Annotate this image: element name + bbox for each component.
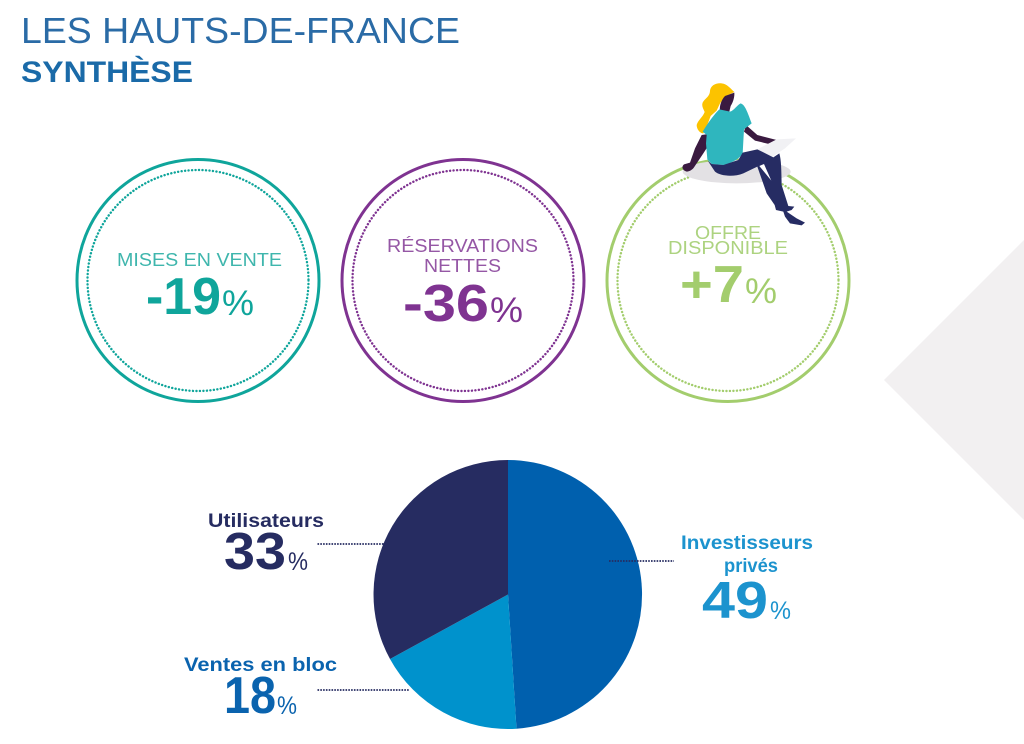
panel: réservations nettes: RÉSERVATIONS: [387, 236, 538, 256]
panel: réservations nettes: NETTES: [424, 256, 501, 276]
label: ventes en bloc: [184, 655, 409, 725]
slice: utilisateurs: [374, 460, 508, 659]
label: utilisateurs: [208, 511, 385, 581]
panel: mises en vente: MISES EN VENTE: [117, 250, 282, 270]
label: investisseurs privés: 49: [702, 572, 768, 630]
panel: offre disponible: OFFRE: [695, 223, 761, 243]
panel: mises en vente: -19: [146, 268, 221, 326]
panel: réservations nettes: %: [490, 291, 523, 330]
label: investisseurs privés: Investisseurs: [681, 533, 813, 554]
slice: investisseurs privés: [508, 460, 642, 729]
panel: offre disponible: %: [745, 272, 777, 311]
subtitle: SYNTHÈSE: [21, 55, 193, 89]
panel: réservations nettes: -36: [403, 275, 489, 333]
panel: offre disponible: +7: [680, 256, 744, 314]
panel: offre disponible: [607, 160, 849, 402]
label: utilisateurs: Utilisateurs: [208, 511, 324, 532]
label: utilisateurs: 33: [224, 523, 286, 581]
label: utilisateurs: %: [288, 548, 308, 576]
label: investisseurs privés: [609, 533, 813, 630]
label: ventes en bloc: %: [277, 692, 297, 720]
background diamond: [884, 240, 1024, 520]
panel: offre disponible: DISPONIBLE: [668, 238, 788, 258]
panel: réservations nettes: [342, 160, 584, 402]
label: ventes en bloc: 18: [224, 667, 276, 725]
slice: ventes en bloc: [390, 594, 516, 729]
pie chart: [374, 460, 642, 729]
panel: mises en vente: %: [222, 284, 254, 323]
label: ventes en bloc: Ventes en bloc: [184, 655, 337, 676]
title: LES HAUTS-DE-FRANCE: [21, 10, 460, 51]
panel: mises en vente: [77, 160, 319, 402]
icon: seated woman reading: [682, 83, 805, 225]
label: investisseurs privés: privés: [724, 556, 778, 577]
label: investisseurs privés: %: [770, 597, 791, 625]
